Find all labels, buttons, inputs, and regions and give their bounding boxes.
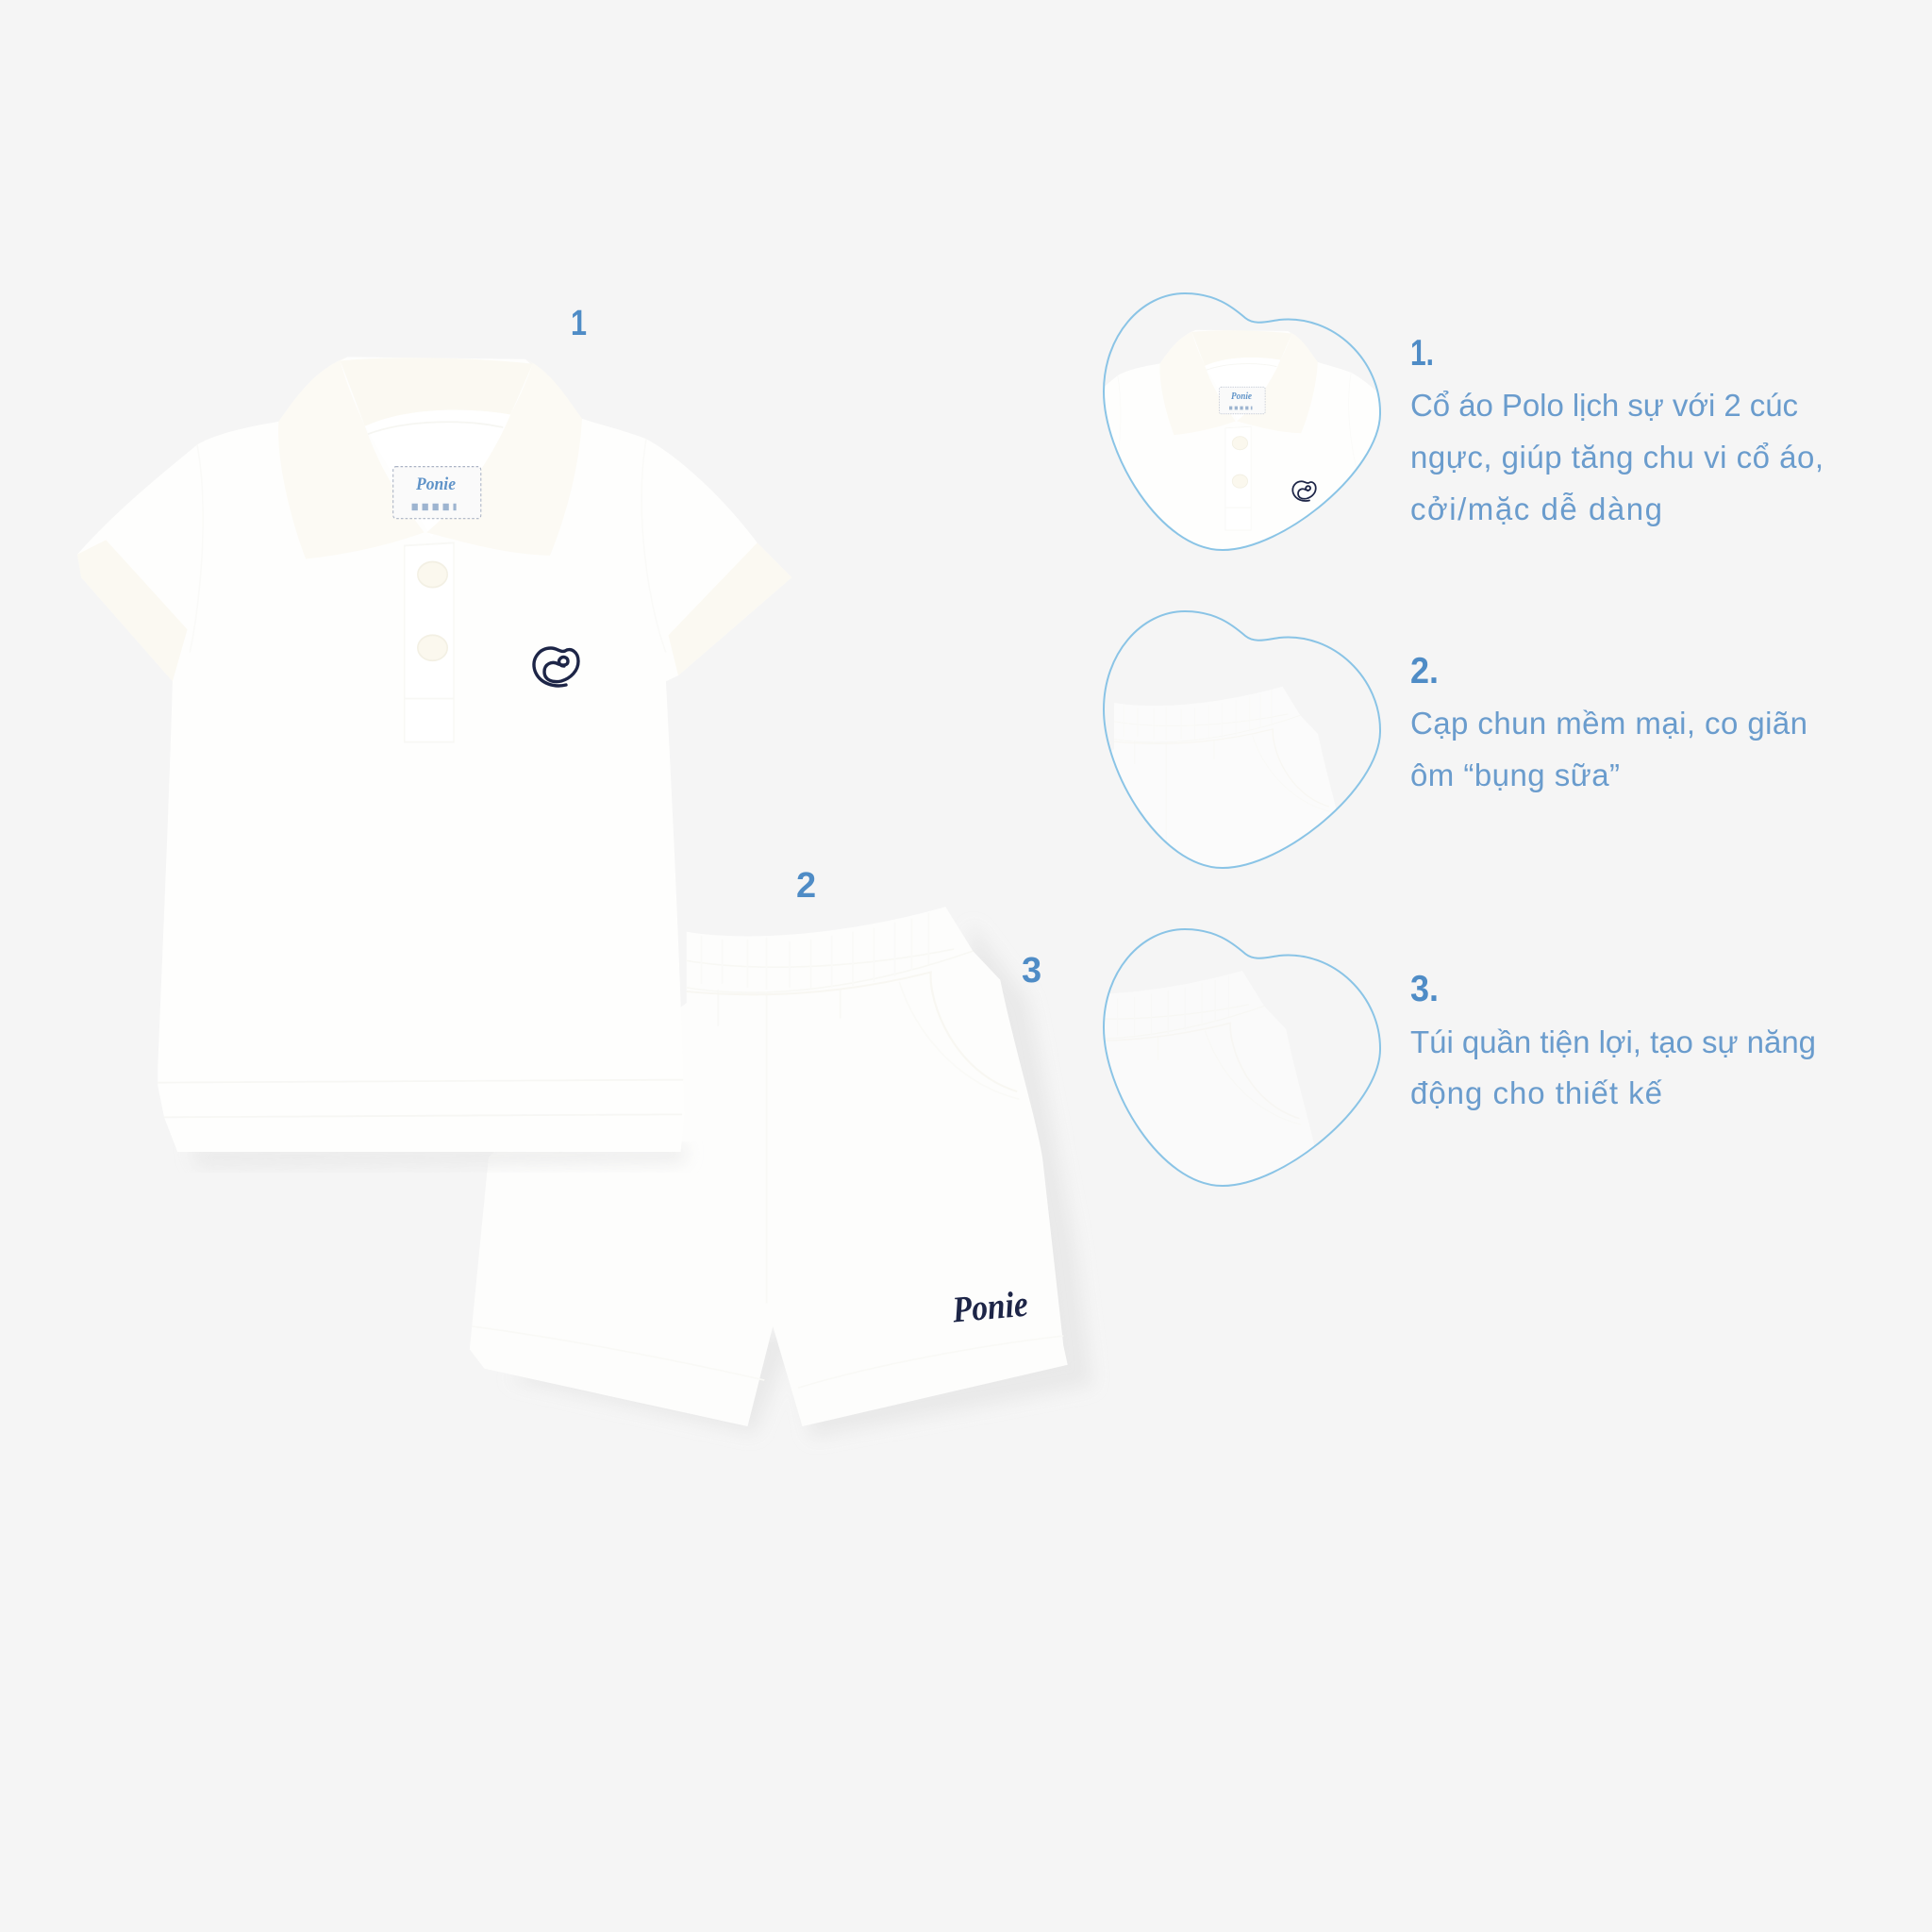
heading 2: 2.	[1410, 651, 1439, 691]
heading 3: 3.	[1410, 969, 1439, 1009]
description 1	[1410, 388, 1824, 526]
chest heart logo	[534, 648, 578, 686]
shorts	[470, 907, 1092, 1438]
number label 2: 2	[796, 866, 816, 906]
neck tag brand: Ponie	[415, 475, 457, 494]
description 2	[1410, 706, 1807, 792]
description 2: ôm “bụng sữa”	[1410, 758, 1620, 792]
embroidered Ponie script: Ponie	[950, 1284, 1029, 1330]
text block 1	[1410, 333, 1824, 526]
description 3: Túi quần tiện lợi, tạo sự năng	[1410, 1024, 1816, 1059]
number label 1: 1	[571, 304, 587, 343]
description 1: Cổ áo Polo lịch sự với 2 cúc	[1410, 388, 1798, 423]
shorts garment	[470, 907, 1068, 1426]
heart callout 3: pocket	[1103, 928, 1381, 1187]
description 2: Cạp chun mềm mại, co giãn	[1410, 706, 1807, 741]
shirt garment	[77, 357, 791, 1152]
heart callout 2: waistband	[1103, 610, 1381, 869]
polo shirt	[77, 357, 791, 1168]
number label 3: 3	[1022, 951, 1041, 991]
description 3: động cho thiết kế	[1410, 1075, 1662, 1110]
description 1: ngực, giúp tăng chu vi cổ áo,	[1410, 440, 1824, 475]
heart callout 1: collar	[1103, 292, 1381, 551]
description 1: cởi/mặc dễ dàng	[1410, 491, 1662, 526]
text block 3	[1410, 969, 1816, 1110]
heart callout 1: collar: Ponie	[1231, 391, 1253, 402]
heading 1: 1.	[1410, 333, 1434, 374]
text block 2	[1410, 651, 1807, 792]
shirt shadow	[189, 1146, 687, 1168]
shorts shadow	[509, 924, 1092, 1438]
description 3	[1410, 1024, 1816, 1110]
